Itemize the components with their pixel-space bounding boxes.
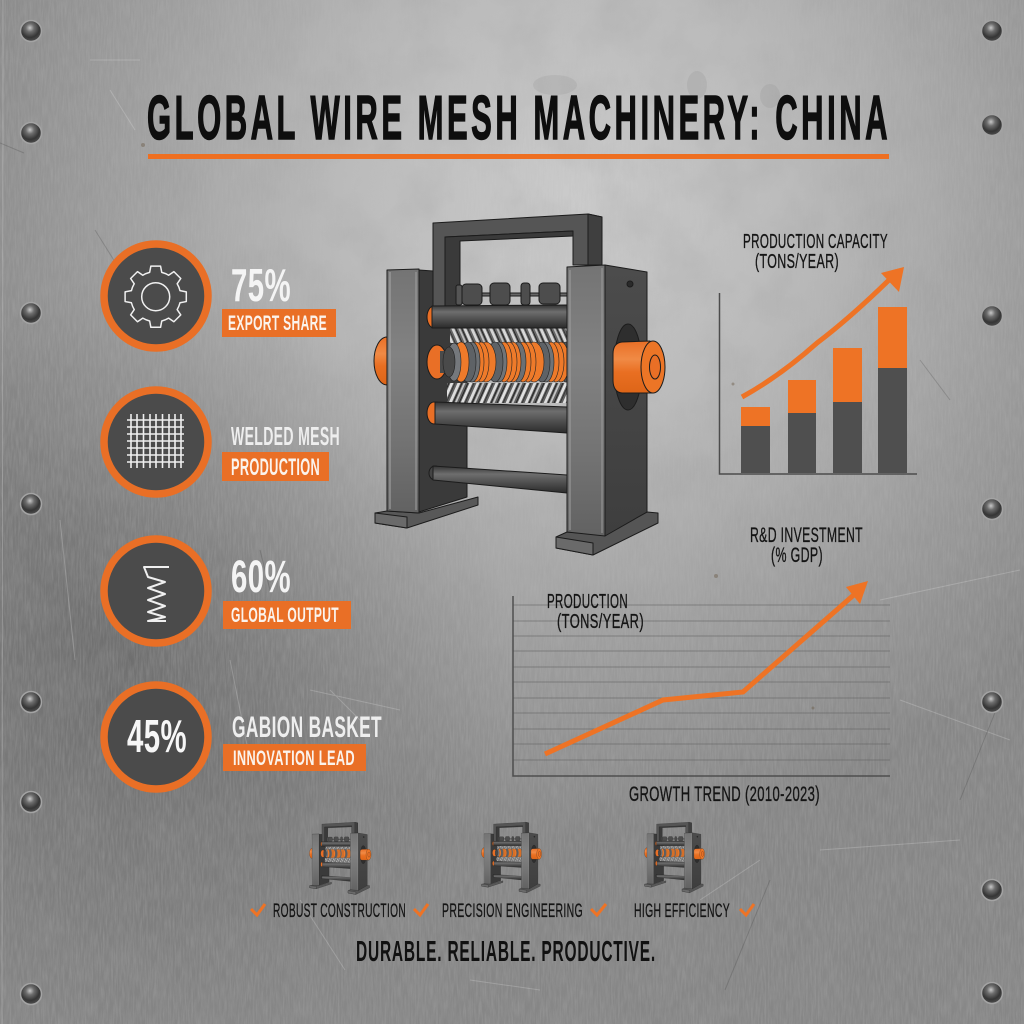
stat: gabion basket innovation lead [104, 685, 382, 789]
chart heading [743, 231, 888, 273]
label: production: PRODUCTION [547, 591, 628, 613]
feature list with check marks: HIGH EFFICIENCY [634, 901, 730, 922]
icon: 45% badge [104, 685, 208, 789]
tagline: DURABLE. RELIABLE. PRODUCTIVE. [356, 936, 656, 968]
badge: export share: EXPORT SHARE [228, 312, 327, 335]
badge: production [222, 452, 329, 481]
stacked bars [741, 307, 907, 473]
feature list with check marks: PRECISION ENGINEERING [442, 901, 583, 922]
stat value 75%: 75% [231, 259, 291, 311]
icon: gear [104, 244, 208, 348]
badge: global output: GLOBAL OUTPUT [231, 604, 339, 627]
label: R&D investment: (% GDP) [771, 544, 823, 567]
badge: global output [223, 601, 351, 629]
badge: innovation lead [223, 744, 366, 771]
stat value 60%: 60% [231, 551, 291, 602]
badge: production: PRODUCTION [231, 454, 320, 481]
badge: export share [222, 309, 336, 337]
bar chart: production capacity [720, 231, 917, 474]
chart heading: (TONS/YEAR) [755, 251, 839, 273]
label: production: (TONS/YEAR) [557, 611, 644, 633]
chart heading: PRODUCTION CAPACITY [743, 231, 888, 253]
line chart: growth trend [513, 524, 890, 806]
label: gabion basket: GABION BASKET [232, 711, 382, 744]
stat: global output [104, 539, 351, 643]
mini machine icons [309, 822, 705, 895]
growth arrow [742, 267, 904, 397]
x axis label: GROWTH TREND (2010-2023) [629, 783, 820, 806]
label: welded mesh: WELDED MESH [231, 421, 340, 451]
label: R&D investment [750, 524, 863, 567]
icon: welded mesh [104, 390, 208, 494]
feature list with check marks: ROBUST CONSTRUCTION [273, 901, 406, 922]
feature list with check marks [251, 901, 754, 922]
icon: spring [104, 539, 208, 643]
icon: 45% badge: 45% [127, 710, 187, 762]
label: R&D investment: R&D INVESTMENT [750, 524, 863, 547]
label: production [547, 591, 644, 633]
stat: export share [104, 244, 336, 348]
gridlines [513, 605, 890, 760]
title underline [148, 154, 889, 159]
central machine illustration [374, 214, 665, 555]
badge: innovation lead: INNOVATION LEAD [233, 747, 355, 770]
trend line [545, 581, 868, 754]
stat: welded mesh production [104, 390, 340, 494]
